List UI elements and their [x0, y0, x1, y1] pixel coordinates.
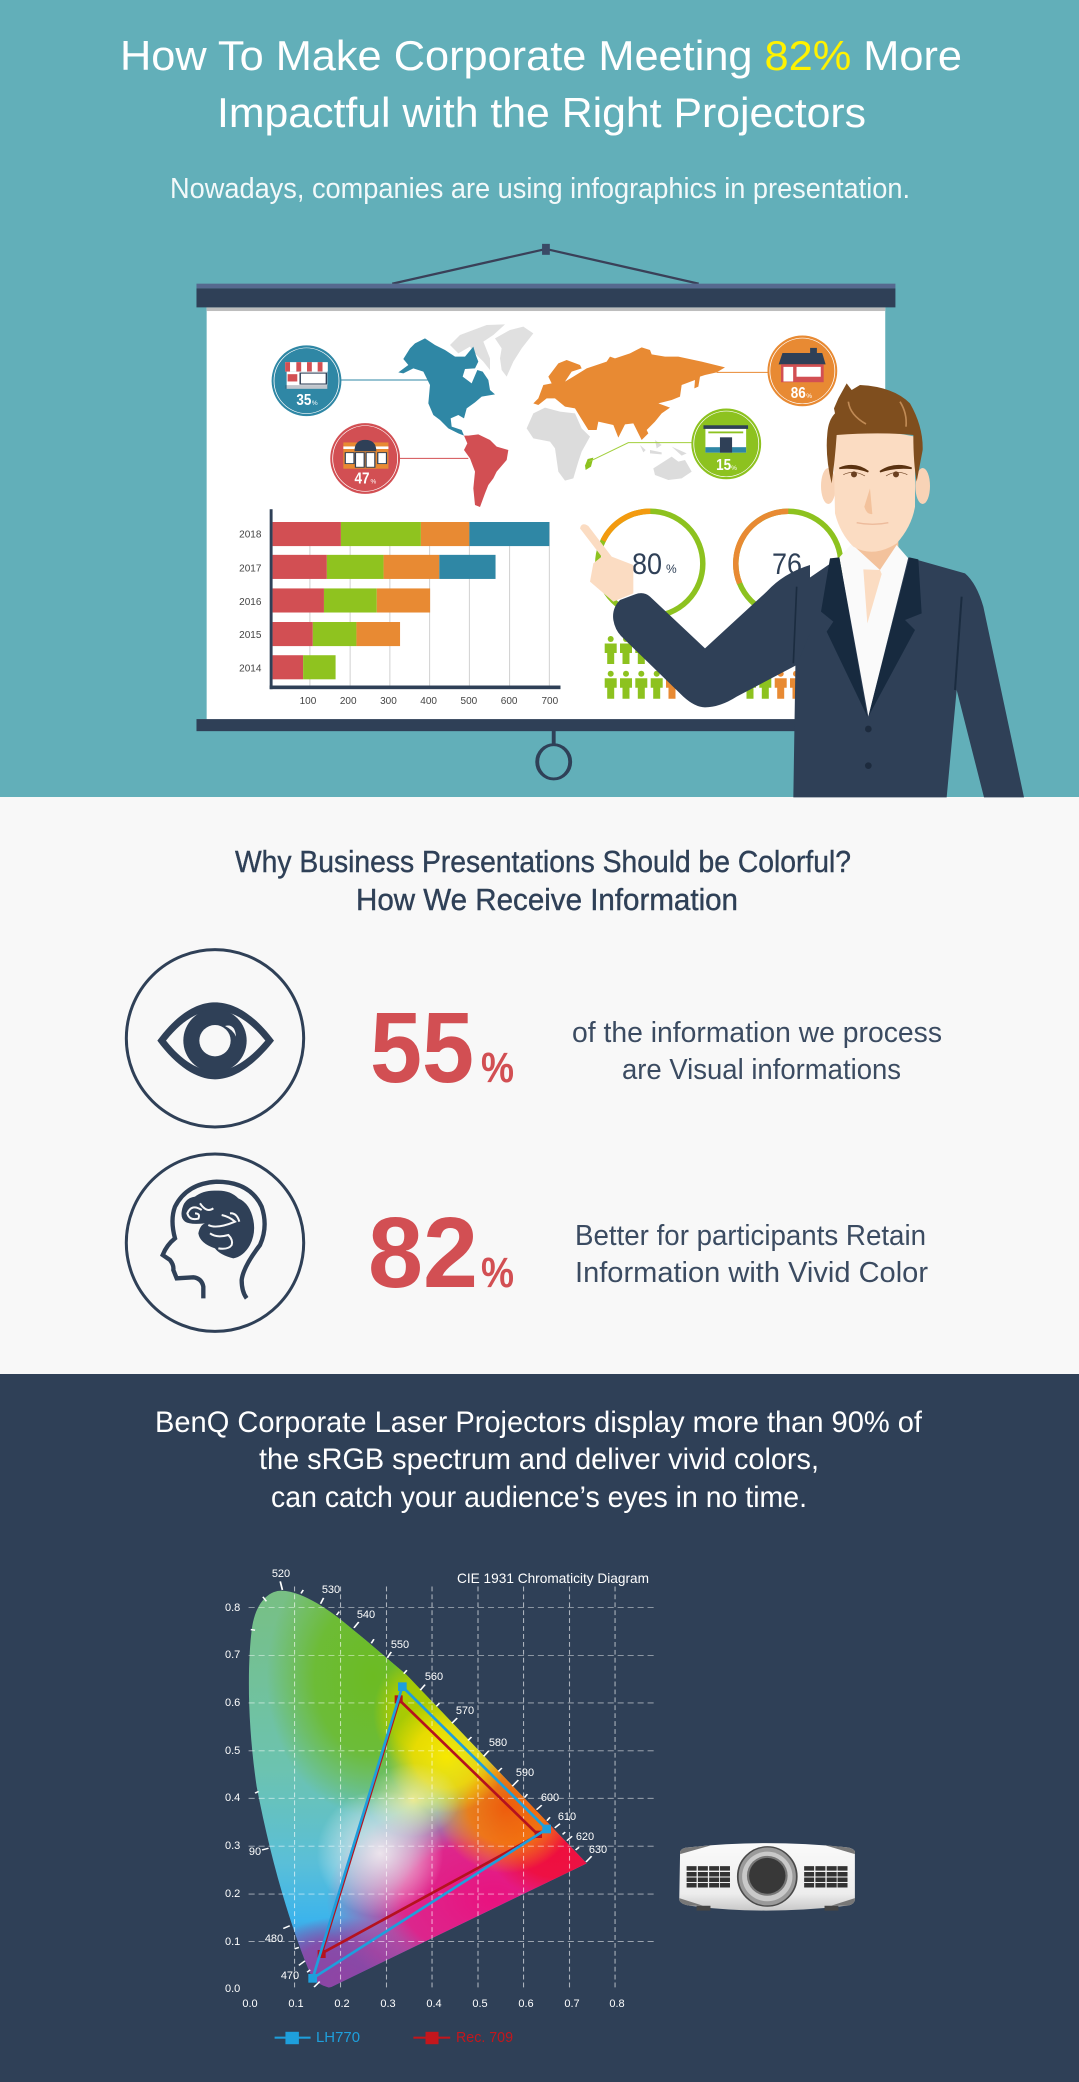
bar: 2014 [273, 655, 336, 679]
badge: 15%: % [731, 465, 737, 472]
map: south america [464, 434, 508, 507]
badge: 47%: 47 [354, 471, 369, 488]
icon: eye in circle [126, 950, 304, 1127]
map: southeast asia islands [640, 440, 687, 456]
y axis labels: 0.3 [225, 1840, 240, 1852]
value labels: 100 [300, 696, 317, 707]
shirt opening [863, 569, 882, 623]
text: BenQ laser projectors: the sRGB spectrum and deliver vivid colors, [259, 1443, 819, 1476]
icon: projector [679, 1843, 855, 1911]
heading: why colorful: How We Receive Information [356, 882, 738, 917]
stat: 55%: % [481, 1044, 514, 1092]
value labels: 700 [541, 696, 559, 707]
y axis labels: 0.6 [225, 1697, 240, 1709]
chart: CIE 1931 chromaticity diagram [225, 1537, 660, 2046]
wavelength labels: 590 [516, 1767, 534, 1779]
wavelength labels: 630 [589, 1844, 607, 1856]
hair [827, 383, 923, 483]
screen frame [196, 244, 895, 779]
year labels [239, 530, 262, 674]
connector: north america [340, 378, 429, 381]
face [833, 431, 915, 552]
world map: eurasia, australia [533, 347, 768, 480]
text: BenQ laser projectors: can catch your audience’s eyes in no time. [271, 1481, 807, 1514]
badge: 35% [272, 345, 341, 416]
stat: 55%: 55 [370, 992, 474, 1104]
triangles: Rec. 709 and LH770 [308, 1682, 551, 1983]
wavelength labels: 550 [391, 1639, 409, 1651]
jacket buttons [865, 726, 872, 769]
wavelength labels: 540 [357, 1609, 375, 1621]
text: retain information: Information with Vivid Color [575, 1257, 928, 1289]
map: australia [653, 457, 692, 480]
year labels: 2016 [239, 597, 262, 608]
wavelength labels: 560 [425, 1671, 443, 1683]
text: visual information: of the information we process [572, 1017, 942, 1049]
bar: 2017 [273, 555, 496, 579]
bar chart [239, 509, 560, 707]
x axis labels: 0.4 [426, 1998, 442, 2010]
map: eurasia [533, 347, 725, 440]
pointing hand [580, 524, 633, 602]
map: greenland [495, 327, 533, 377]
x axis labels: 0.2 [334, 1998, 350, 2010]
mouth [857, 523, 888, 524]
y axis labels: 0.4 [225, 1792, 240, 1804]
world map: americas, greenland, africa [340, 324, 590, 507]
bar: 2015 [273, 622, 400, 646]
y axis labels: 0.1 [225, 1936, 240, 1948]
shirt [839, 544, 908, 717]
presenter man [580, 383, 1024, 797]
projector screen illustration [196, 244, 895, 779]
raised arm [613, 565, 810, 707]
lapels [821, 557, 922, 717]
legend marker: LH770 [275, 2032, 311, 2044]
y axis labels: 0.2 [225, 1888, 240, 1900]
chart title: CIE 1931 Chromaticity Diagram [457, 1570, 649, 1586]
section background: hero [0, 0, 1079, 797]
heading: why colorful: Why Business Presentations Should be Colorful? [235, 844, 851, 879]
x axis labels: 0.3 [380, 1998, 396, 2010]
year labels: 2017 [239, 563, 262, 574]
wavelength labels: 470 [281, 1970, 299, 1982]
head outline [163, 1182, 265, 1298]
wavelength labels [249, 1568, 607, 1982]
wavelength labels: 610 [558, 1811, 576, 1823]
legend labels [316, 2029, 513, 2046]
badge: 47%: % [370, 479, 376, 486]
text: retain information [575, 1220, 928, 1289]
bar: 2016 [273, 588, 430, 613]
title: Impactful with the Right Projectors [217, 89, 866, 136]
wavelength labels: 520 [272, 1568, 290, 1580]
brain folds [187, 1203, 239, 1249]
x axis labels: 0.1 [288, 1998, 304, 2010]
legend labels: LH770 [316, 2029, 360, 2046]
arm seam [793, 587, 797, 663]
text: BenQ laser projectors: BenQ Corporate Laser Projectors display more than 90% of [155, 1406, 923, 1439]
y axis labels: 0.5 [225, 1745, 240, 1757]
donut chart: 76% [736, 511, 841, 616]
grid lines [249, 1586, 655, 1989]
wavelength labels: 90 [249, 1846, 261, 1858]
value labels: 300 [380, 696, 397, 707]
legend labels: Rec. 709 [456, 2029, 513, 2046]
map: north america [398, 338, 495, 436]
text: visual information [572, 1017, 942, 1086]
neck [852, 527, 898, 572]
section background: laser projectors [0, 1374, 1079, 2082]
bar: 2018 [273, 522, 549, 546]
triangle: Rec. 709 [318, 1695, 542, 1958]
badge: 15%: 15 [716, 457, 731, 474]
stat: 82%: % [481, 1249, 514, 1297]
donut chart: 80% [598, 511, 703, 616]
wavelength labels: 600 [541, 1792, 559, 1804]
section background: how we receive information [0, 797, 1079, 1374]
legend marker: Rec. 709 [413, 2032, 450, 2044]
wavelength labels: 570 [456, 1705, 474, 1717]
badge: 15% [691, 408, 761, 479]
title: How To Make Corporate Meeting 82% More [120, 32, 962, 79]
badge: 86%: 86 [791, 385, 806, 402]
wavelength labels: 530 [322, 1584, 340, 1596]
badge: 47% [330, 423, 400, 494]
text: visual information: are Visual informations [622, 1054, 901, 1086]
jacket body [793, 557, 1024, 797]
wavelength labels: 580 [489, 1737, 507, 1749]
text: BenQ laser projectors [155, 1406, 923, 1514]
connector: asia [717, 371, 768, 374]
people pictogram [605, 636, 802, 699]
subtitle: Nowadays, companies are using infographics in presentation. [170, 173, 910, 205]
value labels: 200 [340, 696, 357, 707]
connector: south america [400, 457, 468, 460]
donut chart: 76%: 76 [772, 548, 802, 581]
year labels: 2018 [239, 530, 262, 541]
heading: why colorful [235, 844, 851, 917]
x axis labels [242, 1998, 625, 2010]
year labels: 2015 [239, 630, 262, 641]
wavelength ticks [251, 1581, 592, 1987]
ears [821, 468, 930, 504]
hair highlights [848, 402, 906, 427]
badge: 86% [767, 335, 837, 406]
x axis labels: 0.6 [518, 1998, 534, 2010]
donut chart: 80%: % [666, 562, 677, 576]
sleeve seam [955, 597, 962, 690]
wavelength labels: 620 [576, 1831, 594, 1843]
y axis labels: 0.7 [225, 1649, 240, 1661]
value labels [300, 696, 559, 707]
badge: 86%: % [806, 393, 812, 400]
badge: 35%: % [312, 400, 318, 407]
map: arctic islands [450, 324, 505, 370]
badge: 35%: 35 [296, 392, 312, 409]
triangle: LH770 [308, 1682, 551, 1983]
nose [864, 488, 872, 514]
x axis labels: 0.7 [564, 1998, 580, 2010]
year labels: 2014 [239, 663, 262, 674]
eyebrows and eyes [839, 466, 912, 477]
y axis labels: 0.8 [225, 1602, 240, 1614]
chart axes [270, 509, 560, 689]
title [120, 32, 962, 136]
color gamut horseshoe [248, 1590, 586, 1988]
value labels: 400 [420, 696, 437, 707]
x axis labels: 0.0 [242, 1998, 258, 2010]
connector: madagascar [589, 443, 692, 462]
text: retain information: Better for participants Retain [575, 1220, 926, 1252]
x axis labels: 0.8 [609, 1998, 625, 2010]
stat: 82%: 82 [368, 1197, 478, 1309]
map: africa [527, 408, 590, 481]
map: madagascar [585, 458, 593, 470]
brain [181, 1191, 254, 1258]
y axis labels: 0.0 [225, 1983, 240, 1995]
icon: brain in head circle [126, 1154, 304, 1331]
donut chart: 80%: 80 [632, 548, 662, 581]
x axis labels: 0.5 [472, 1998, 488, 2010]
value labels: 500 [461, 696, 478, 707]
y axis labels [225, 1602, 240, 1995]
wavelength labels: 480 [265, 1933, 283, 1945]
value labels: 600 [501, 696, 518, 707]
